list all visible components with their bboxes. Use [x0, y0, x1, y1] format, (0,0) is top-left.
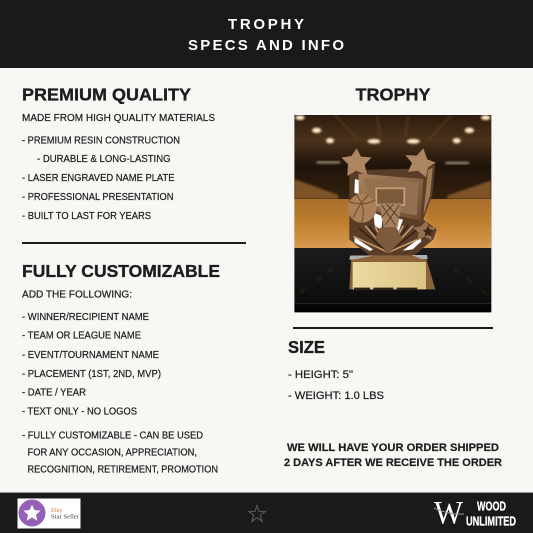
customization list: - EVENT/TOURNAMENT NAME [22, 350, 159, 361]
feature list: - BUILT TO LAST FOR YEARS [22, 211, 151, 222]
etsy star seller badge: Etsy [51, 507, 63, 514]
customization note: FOR ANY OCCASION, APPRECIATION, [28, 447, 197, 458]
heading: size: SIZE [288, 337, 325, 357]
icon: purple badge [18, 500, 46, 526]
feature list: - PROFESSIONAL PRESENTATION [22, 192, 174, 203]
panel: fully customizable [22, 261, 220, 476]
footer band [0, 492, 533, 533]
net [379, 203, 402, 227]
feature list: - DURABLE & LONG-LASTING [37, 154, 171, 165]
size specs: - WEIGHT: 1.0 LBS [288, 390, 384, 402]
heading: fully customizable: FULLY CUSTOMIZABLE [22, 261, 220, 281]
shipping notice [284, 442, 502, 469]
header title: SPECS AND INFO [188, 37, 344, 54]
trophy [341, 148, 437, 289]
customization list [22, 312, 161, 417]
heading: trophy: TROPHY [356, 84, 431, 104]
heading: premium quality: PREMIUM QUALITY [22, 84, 191, 104]
base [349, 255, 435, 289]
wings [423, 167, 433, 216]
size specs: - HEIGHT: 5" [288, 369, 353, 381]
basketball [348, 194, 376, 223]
customization note [22, 431, 218, 476]
subheading: materials: MADE FROM HIGH QUALITY MATERIALS [22, 113, 215, 124]
customization list: - PLACEMENT (1ST, 2ND, MVP) [22, 369, 161, 380]
wood unlimited logo [434, 496, 516, 532]
product photo [294, 115, 491, 312]
feature list: - PREMIUM RESIN CONSTRUCTION [22, 135, 180, 146]
icon: outline star [249, 506, 265, 522]
panel: premium quality [22, 84, 215, 222]
header title: TROPHY [228, 16, 304, 33]
size specs [288, 369, 384, 402]
customization list: - DATE / YEAR [22, 388, 86, 399]
logo wordmark: UNLIMITED [466, 514, 516, 528]
header band [0, 0, 533, 68]
shipping notice: 2 DAYS AFTER WE RECEIVE THE ORDER [284, 457, 502, 469]
customization list: - TEAM OR LEAGUE NAME [22, 331, 141, 342]
backboard [359, 174, 423, 221]
stars [341, 148, 372, 176]
feature list: - LASER ENGRAVED NAME PLATE [22, 173, 175, 184]
customization note: RECOGNITION, RETIREMENT, PROMOTION [28, 465, 218, 476]
customization note: - FULLY CUSTOMIZABLE - CAN BE USED [22, 431, 203, 442]
header title [188, 16, 344, 54]
etsy star seller badge: Star Seller [51, 514, 79, 520]
logo wordmark: WOOD [477, 500, 506, 514]
arena backdrop [294, 115, 491, 312]
logo wordmark [466, 500, 516, 528]
subheading: add the following: ADD THE FOLLOWING: [22, 290, 132, 301]
customization list: - WINNER/RECIPIENT NAME [22, 312, 149, 323]
logo monogram: W [434, 496, 464, 532]
silhouette [349, 164, 437, 256]
name plate [353, 262, 426, 289]
customization list: - TEXT ONLY - NO LOGOS [22, 406, 137, 417]
feature list [22, 135, 180, 222]
shipping notice: WE WILL HAVE YOUR ORDER SHIPPED [287, 442, 499, 454]
table [294, 248, 491, 303]
panel: size [288, 337, 384, 402]
etsy star seller badge [18, 498, 80, 528]
